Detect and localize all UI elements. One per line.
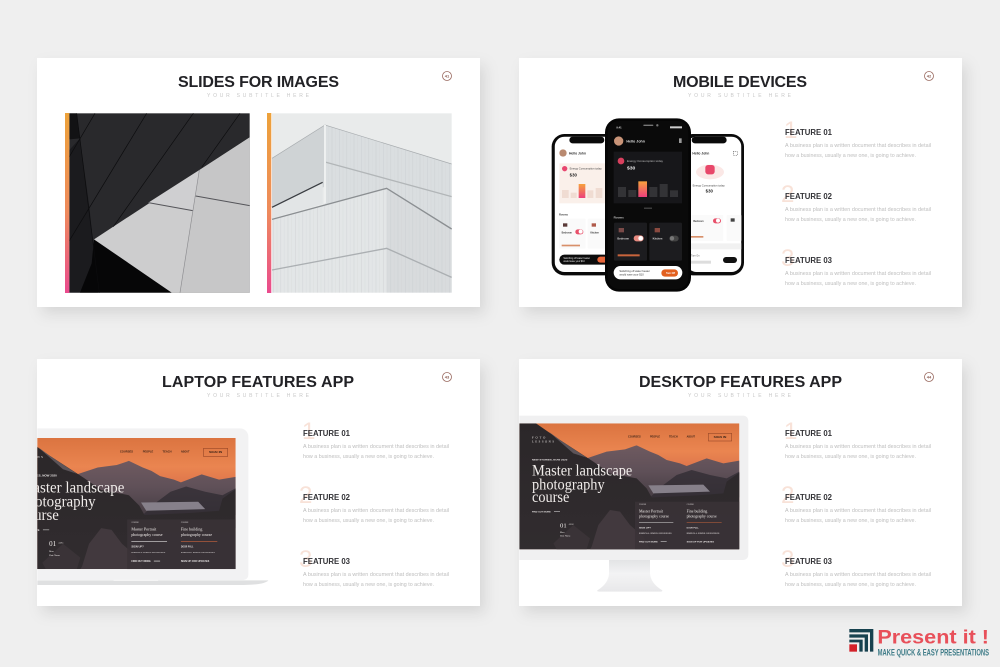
monitor body <box>519 416 748 560</box>
feature 01: how a business, usually a new one, is going to achieve. <box>785 454 916 460</box>
feature 02 <box>781 482 931 524</box>
feature 01: 1 <box>784 117 797 144</box>
monitor screen: course <box>532 489 570 506</box>
monitor screen: NEW STORIES, NOW 2020 <box>532 459 568 461</box>
monitor screen: ENROLL ENDS 02/03/2020 <box>639 533 673 535</box>
page number badge: 43 <box>445 374 450 380</box>
monitor screen: ABOUT <box>687 435 696 438</box>
monitor screen: SIGN IN <box>714 437 727 439</box>
left phone: Hello John <box>569 151 586 155</box>
laptop screen: SIGN UP FOR UPDATES <box>181 560 210 563</box>
laptop screen: Date Name <box>49 554 60 557</box>
laptop screen: LESSONS <box>20 455 43 459</box>
feature 01: A business plan is a written document that describes in detail <box>785 143 931 149</box>
feature 02 <box>299 482 449 524</box>
feature 01: 1 <box>784 418 797 445</box>
heading: SLIDES FOR IMAGES <box>178 74 339 91</box>
page number badge <box>924 372 934 382</box>
feature list <box>781 117 931 287</box>
monitor screen: photography <box>532 476 605 493</box>
desktop monitor mockup <box>519 416 748 592</box>
monitor screen: 01 <box>560 522 567 529</box>
laptop screen: PEOPLE <box>143 451 154 454</box>
feature 03: A business plan is a written document that describes in detail <box>785 271 931 277</box>
feature 02: 2 <box>299 482 312 509</box>
monitor screen: Master landscape <box>532 463 633 480</box>
heading: LAPTOP FEATURES APP <box>162 374 354 391</box>
laptop screen: AUG <box>58 542 64 545</box>
center phone: 9:41 <box>616 126 622 130</box>
center phone: Turn Off <box>666 273 675 275</box>
laptop screen: photography course <box>131 532 163 537</box>
laptop screen: ENROLL ENDS 02/03/2020 <box>181 552 216 554</box>
panel: desktop features app <box>519 359 962 606</box>
feature 03: 3 <box>781 245 794 272</box>
laptop screen: COURSES <box>120 451 133 454</box>
left phone: Bedroom <box>562 232 572 234</box>
feature 02: A business plan is a written document that describes in detail <box>785 207 931 213</box>
feature 03: how a business, usually a new one, is going to achieve. <box>303 582 434 588</box>
laptop screen: COURSE <box>131 522 140 524</box>
center phone: $30 <box>627 166 636 172</box>
phones mockup <box>552 118 744 292</box>
monitor screen: LESSONS <box>532 439 554 443</box>
feature 03: 3 <box>299 546 312 573</box>
page number badge <box>442 72 452 80</box>
feature 03: A business plan is a written document that describes in detail <box>785 572 931 578</box>
brand logo: Present it! <box>849 627 989 657</box>
feature 02: 2 <box>781 181 794 208</box>
page number badge: 44 <box>927 374 932 380</box>
center phone: Energy Consumption today <box>627 159 664 163</box>
feature 02: A business plan is a written document that describes in detail <box>785 508 931 514</box>
logo wordmark: Present it ! <box>877 627 989 648</box>
center phone: Hello John <box>626 140 645 144</box>
laptop base <box>37 580 268 585</box>
feature 03 <box>299 546 449 588</box>
monitor screen: AUG <box>569 523 574 526</box>
left phone: Energy Consumption today <box>570 167 602 171</box>
laptop screen: ENROLL ENDS 02/03/2020 <box>131 552 166 554</box>
laptop screen <box>37 438 236 570</box>
monitor screen: ENROLL ENDS 02/03/2020 <box>687 533 720 535</box>
monitor screen <box>519 423 739 549</box>
monitor screen: Fine building <box>687 508 708 513</box>
left phone: $30 <box>570 172 577 177</box>
feature 03 <box>781 245 931 287</box>
center phone <box>605 118 691 292</box>
laptop screen: photography <box>20 494 96 511</box>
feature 02: FEATURE 02 <box>785 493 833 502</box>
monitor screen: COURSE <box>687 504 695 506</box>
center phone: Bedroom <box>617 237 630 241</box>
monitor screen: photography course <box>687 513 717 518</box>
panel: mobile devices <box>519 58 962 307</box>
monitor screen: Master Portrait <box>639 508 664 513</box>
feature 03: FEATURE 03 <box>785 256 833 265</box>
feature 01: FEATURE 01 <box>785 128 833 137</box>
feature 03: FEATURE 03 <box>785 557 833 566</box>
feature 03: how a business, usually a new one, is going to achieve. <box>785 281 916 287</box>
feature 01: FEATURE 01 <box>785 429 833 438</box>
right phone: Bedroom <box>693 221 704 223</box>
feature 01: how a business, usually a new one, is going to achieve. <box>303 454 434 460</box>
feature 01: how a business, usually a new one, is going to achieve. <box>785 153 916 159</box>
monitor screen: COURSE <box>639 504 647 506</box>
feature 01 <box>302 418 449 460</box>
feature 02: how a business, usually a new one, is going to achieve. <box>303 518 434 524</box>
feature 03: 3 <box>781 546 794 573</box>
left phone <box>552 134 605 276</box>
center phone: Kitchen <box>653 237 663 241</box>
left phone: Kitchen <box>590 231 599 234</box>
laptop screen: Master Portrait <box>131 527 157 532</box>
monitor screen: FIND OUT MORE <box>639 542 658 544</box>
feature 03: FEATURE 03 <box>303 557 351 566</box>
laptop screen: TEACH <box>163 451 172 454</box>
feature 02: how a business, usually a new one, is going to achieve. <box>785 518 916 524</box>
subtitle: YOUR SUBTITLE HERE <box>688 93 792 99</box>
monitor screen: COURSES <box>628 436 641 438</box>
feature 02: A business plan is a written document that describes in detail <box>303 508 449 514</box>
heading: DESKTOP FEATURES APP <box>639 374 842 391</box>
monitor stand <box>597 559 662 592</box>
feature 02: FEATURE 02 <box>785 192 833 201</box>
feature 03 <box>781 546 931 588</box>
laptop screen: NEW STORIES, NOW 2020 <box>20 475 58 477</box>
feature 03: A business plan is a written document that describes in detail <box>303 572 449 578</box>
page number badge: 41 <box>445 74 450 78</box>
laptop screen: Master landscape <box>20 479 124 496</box>
feature 02: how a business, usually a new one, is going to achieve. <box>785 217 916 223</box>
monitor screen: PEOPLE <box>650 436 660 438</box>
right phone: Energy Consumption today <box>693 183 725 187</box>
monitor screen: DOOR PULL <box>687 528 699 530</box>
right phone: $30 <box>706 189 713 194</box>
feature 02: FEATURE 02 <box>303 493 351 502</box>
laptop screen: FOTO <box>20 451 35 455</box>
feature 01: A business plan is a written document that describes in detail <box>785 444 931 450</box>
feature 02 <box>781 181 931 223</box>
feature list <box>781 418 931 588</box>
monitor screen: Mon <box>560 531 565 534</box>
feature 01 <box>784 117 931 159</box>
image: dark angular architecture <box>69 113 250 293</box>
image: white ribbed building <box>272 113 452 293</box>
monitor screen: photography course <box>639 513 669 518</box>
monitor screen: FOTO <box>532 436 546 440</box>
laptop screen: photography course <box>181 532 212 537</box>
laptop screen: COURSE <box>181 522 189 524</box>
monitor screen: TEACH <box>669 435 678 438</box>
laptop screen: SIGN IN <box>209 451 223 454</box>
subtitle: YOUR SUBTITLE HERE <box>688 393 792 399</box>
laptop screen: Mon <box>49 550 55 553</box>
feature 01: FEATURE 01 <box>303 429 351 438</box>
monitor screen: FIND OUT MORE <box>532 512 551 514</box>
feature 01: 1 <box>302 418 315 445</box>
right phone: Hello John <box>692 151 709 155</box>
laptop screen: ABOUT <box>181 451 190 454</box>
laptop screen: FIND OUT MORE <box>20 530 40 532</box>
monitor screen: SIGN UP FOR UPDATES <box>687 541 715 544</box>
right phone: Turn On <box>691 255 700 258</box>
laptop screen: FIND OUT MORE <box>131 561 151 563</box>
left phone: would save your $10 <box>563 260 585 263</box>
laptop body <box>37 428 248 580</box>
center phone: Rooms <box>614 216 624 220</box>
subtitle: YOUR SUBTITLE HERE <box>207 93 310 99</box>
feature 02: 2 <box>781 482 794 509</box>
subtitle: YOUR SUBTITLE HERE <box>207 393 310 399</box>
accent bar: left image <box>65 113 69 293</box>
monitor screen: Date Name <box>560 535 571 538</box>
feature 03: how a business, usually a new one, is going to achieve. <box>785 582 916 588</box>
panel: laptop features app <box>7 359 480 606</box>
logo icon <box>849 629 873 652</box>
page number badge <box>442 372 452 382</box>
laptop screen: course <box>20 507 59 524</box>
left phone: Switching off water heater <box>563 257 590 260</box>
feature list <box>299 418 449 588</box>
heading: MOBILE DEVICES <box>673 74 807 91</box>
laptop screen: 01 <box>49 541 57 548</box>
center phone: Switching off water heater <box>619 269 650 273</box>
accent bar: right image <box>267 113 271 293</box>
left phone: Rooms <box>559 212 569 216</box>
feature 01: A business plan is a written document that describes in detail <box>303 444 449 450</box>
monitor screen: SIGN UP? <box>639 528 652 530</box>
laptop screen: SIGN UP? <box>131 547 145 549</box>
page number badge <box>924 72 934 80</box>
center phone: would save your $10 <box>619 273 644 277</box>
page number badge: 42 <box>927 74 932 78</box>
laptop mockup <box>37 428 268 585</box>
laptop screen: DOOR PULL <box>181 547 194 549</box>
right phone <box>691 134 744 276</box>
laptop screen: Fine building <box>181 527 203 532</box>
feature 01 <box>784 418 931 460</box>
panel: slides for images <box>37 58 480 307</box>
